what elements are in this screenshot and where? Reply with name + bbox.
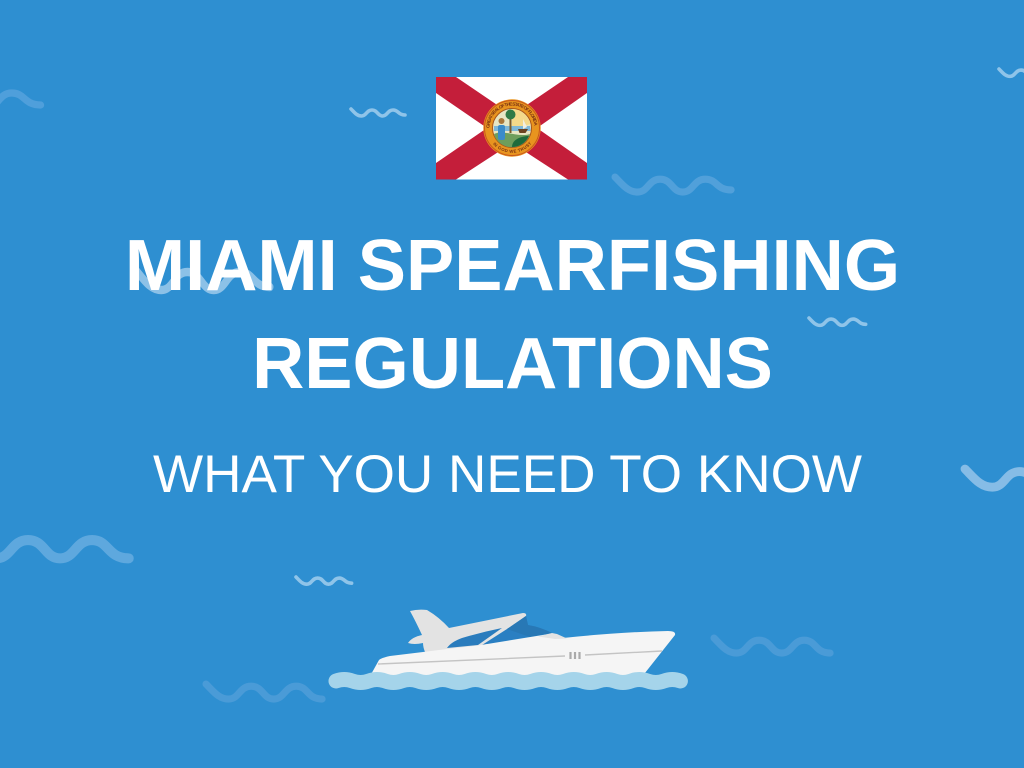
decorative wave: top right (999, 69, 1024, 76)
decorative wave: far right (965, 469, 1024, 487)
seal motto (495, 142, 529, 150)
icon: state seal: GREAT SEAL OF THE STATE OF FLORIDA (486, 102, 538, 128)
title (125, 226, 900, 404)
subtitle: WHAT YOU NEED TO KNOW (153, 445, 862, 504)
title: REGULATIONS (252, 324, 773, 404)
boat left window (447, 628, 502, 648)
decorative wave: lower left (0, 537, 129, 558)
decorative wave: top centre small (351, 109, 405, 116)
icon: state seal (483, 99, 541, 157)
decorative wave: small lower centre (296, 577, 352, 584)
hull stripe (378, 651, 662, 664)
icon: yacht (336, 610, 680, 682)
boat windshield (482, 616, 552, 645)
decorative wave: below flag (615, 177, 731, 192)
decorative wave: right of boat (714, 638, 830, 653)
boat hull (369, 631, 675, 678)
decorative wave: bottom left of boat (206, 684, 322, 699)
windshield shade (507, 616, 552, 637)
seal inscription (490, 106, 534, 128)
water under boat (336, 680, 680, 682)
decorative wave: behind title (135, 269, 270, 290)
boat deck strip (538, 633, 567, 639)
title: MIAMI SPEARFISHING (125, 226, 900, 306)
decorative wave: right of title (809, 318, 866, 325)
icon: Florida flag (436, 77, 587, 180)
decorative wave: top left (0, 91, 41, 107)
boat cabin fin (408, 610, 526, 652)
hull vents (570, 652, 580, 659)
icon: state seal: IN GOD WE TRUST (493, 142, 531, 153)
